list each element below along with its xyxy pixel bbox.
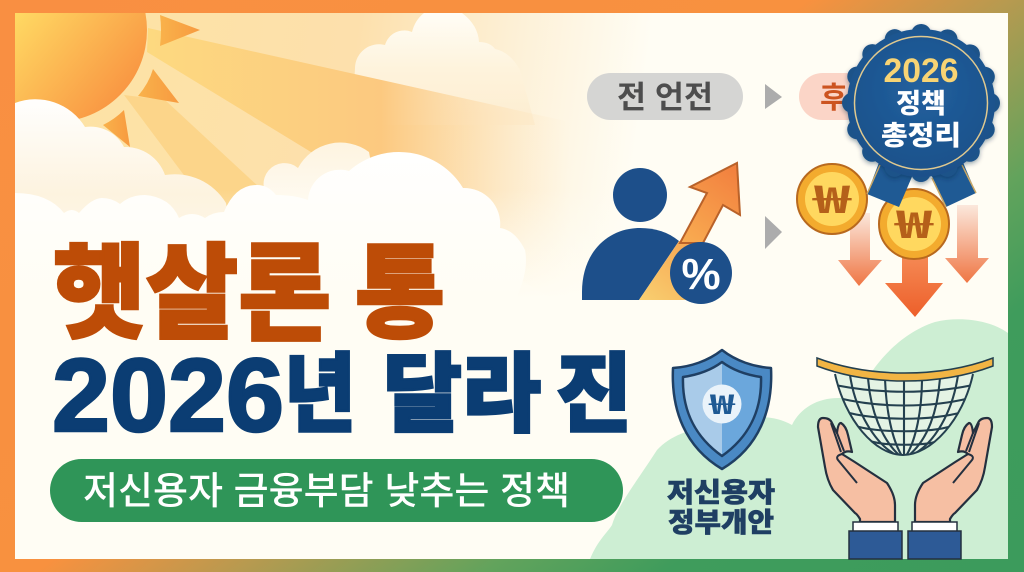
arrow: rate to coins [765,216,782,249]
ribbons [867,160,976,207]
title line 2: 달라 [383,324,541,449]
icon: won coin left [797,164,867,234]
percent circle: % [681,250,721,299]
title line 1: 통 [355,210,445,359]
before pill: 전 언전 [617,72,713,117]
down arrows [838,205,989,317]
icon: right hand [908,418,992,559]
seal [847,29,995,177]
after pill: 후 [820,73,848,117]
badge text: 정책 [896,82,946,121]
sun [15,13,147,119]
cloud top right [352,13,535,125]
icon: won coin left: ₩ [812,169,853,224]
cloud mid back [264,142,370,200]
shield caption [667,471,775,540]
green hill [590,319,1008,559]
person [582,168,679,300]
icon: won coin center: ₩ [894,194,935,249]
badge text [881,52,961,153]
before pill [587,72,743,120]
icon: person with rising rate [582,163,740,304]
icon: shield with won [673,350,771,469]
icon: won coin center [879,189,949,259]
ring [854,36,988,170]
sky glow [79,13,616,246]
cloud left [15,99,226,218]
subtitle pill: 저신용자 금융부담 낮추는 정책 [83,460,570,515]
shield caption: 정부개안 [668,501,774,540]
cloud front [15,152,526,290]
title line 2: 진 [556,324,632,449]
title line 1: 햇살론 [53,210,331,359]
badge: 2026 policy summary [847,29,995,207]
icon: left hand [818,418,902,559]
ribbon edges [867,165,976,207]
badge text: 2026 [884,52,958,90]
sun triangles [103,15,200,147]
title line 2: 년 [284,324,356,449]
net mesh [835,375,973,456]
shield caption: 저신용자 [667,471,775,510]
after pill [799,73,899,120]
sun rays [124,28,536,236]
icon: safety net [817,358,993,456]
sky fade [15,198,578,343]
wedge [639,241,705,300]
title line 2 [52,324,632,454]
arrow: before to after [765,84,782,109]
net bowl [835,374,973,455]
net rim [817,358,993,381]
badge text: 총정리 [881,114,961,153]
icon: shield with won: ₩ [708,383,736,422]
percent circle [670,242,732,304]
rising arrow [680,163,740,243]
title line 2: 2026 [52,338,284,454]
